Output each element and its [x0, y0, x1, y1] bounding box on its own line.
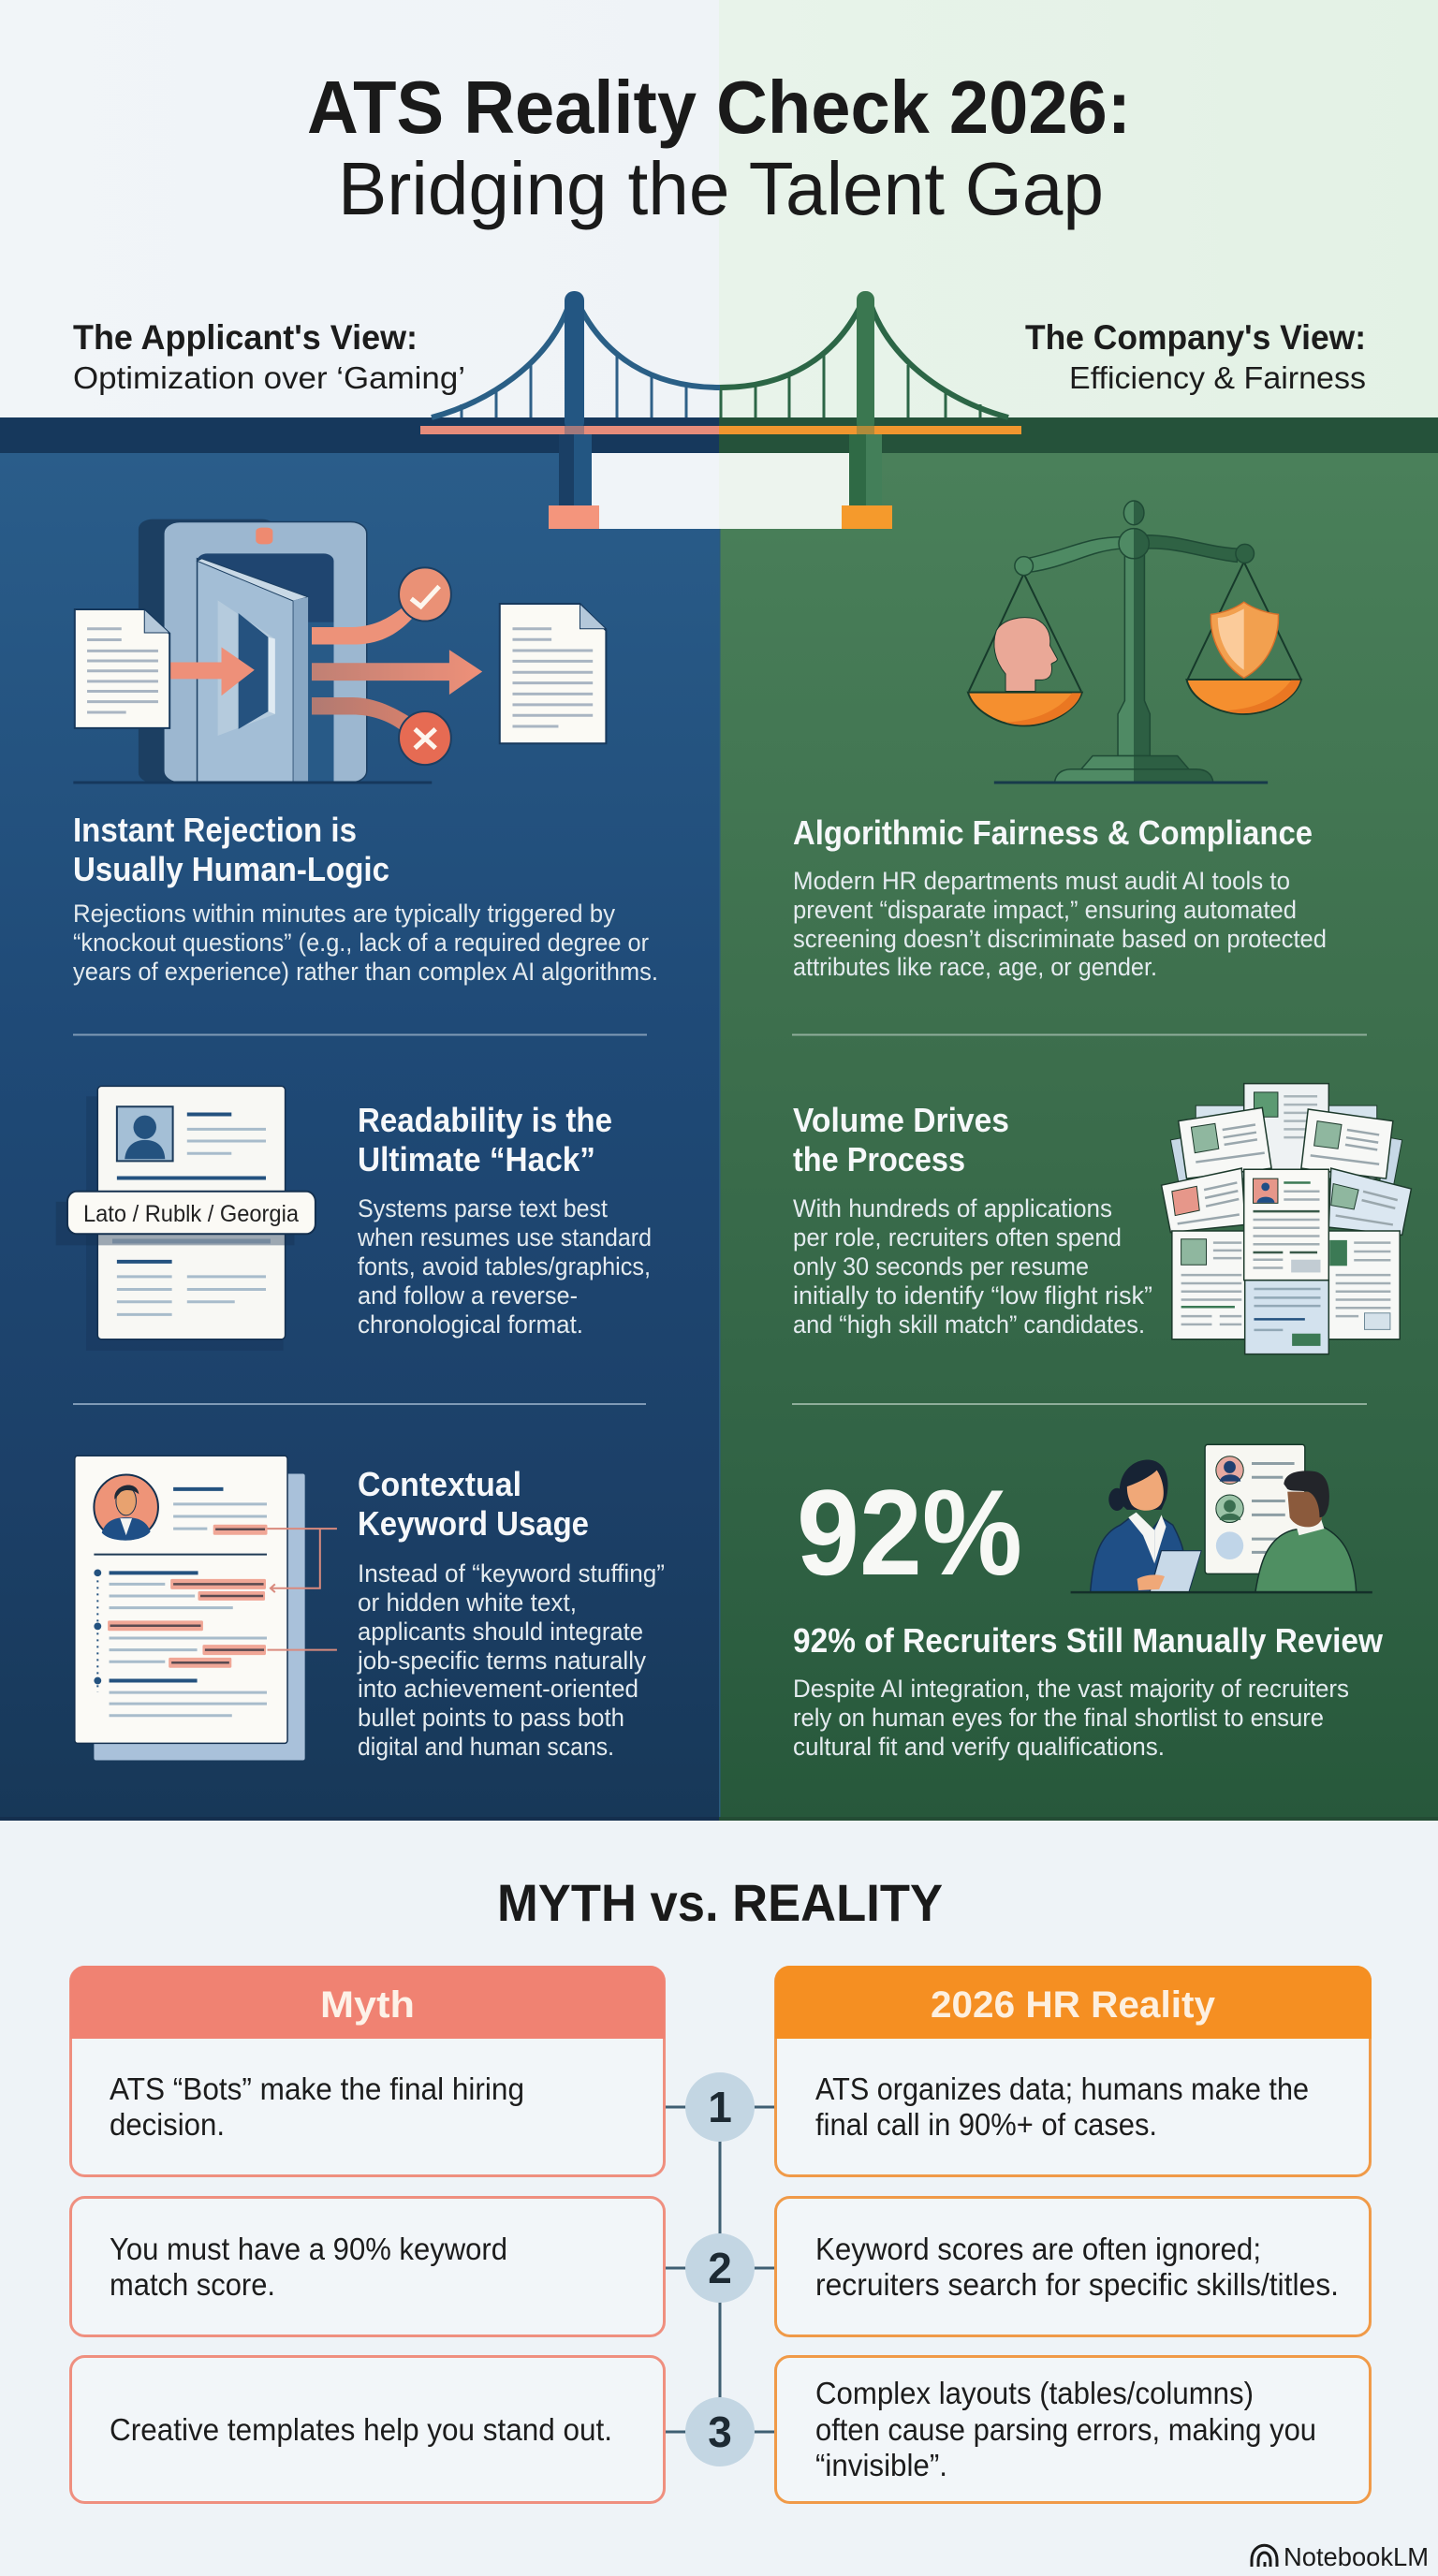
- text block: contextual keyword usage: Instead of “keyword stuffing”: [358, 1559, 665, 1588]
- text block: instant rejection: Rejections within minutes are typically triggered by: [73, 900, 615, 928]
- icon: readable resume with font label: [56, 1086, 315, 1351]
- text block: volume drives the process: per role, recruiters often spend: [793, 1223, 1122, 1251]
- myth card 1 with header: Myth: [320, 1984, 415, 2026]
- text block: algorithmic fairness: Modern HR departments must audit AI tools to: [793, 867, 1290, 895]
- icon: balance scales weighing a person and a shield: [968, 501, 1301, 783]
- text block: volume drives the process: the Process: [793, 1140, 965, 1178]
- reality card 3: often cause parsing errors, making you: [815, 2412, 1316, 2447]
- text block: volume drives the process: and “high skill match” candidates.: [793, 1310, 1145, 1339]
- text block: readability: and follow a reverse-: [358, 1281, 578, 1310]
- text block: algorithmic fairness: screening doesn’t discriminate based on protected: [793, 925, 1327, 953]
- text block: contextual keyword usage: [357, 1465, 665, 1761]
- text block: contextual keyword usage: Keyword Usage: [358, 1504, 589, 1543]
- reality card 1 with header: [775, 1966, 1372, 2175]
- myth card 2: [71, 2198, 665, 2336]
- number badge 3: [685, 2397, 755, 2466]
- text block: recruiters still manually review: Despite AI integration, the vast majority of recruiters: [793, 1675, 1349, 1703]
- text block: volume drives the process: [793, 1101, 1152, 1339]
- myth card 3: [71, 2357, 665, 2503]
- myth card 2: match score.: [110, 2267, 275, 2302]
- number badge 1: 1: [708, 2083, 732, 2131]
- text block: volume drives the process: initially to identify “low flight risk”: [793, 1281, 1152, 1310]
- text block: instant rejection: years of experience) rather than complex AI algorithms.: [73, 958, 658, 986]
- heading: myth vs reality: MYTH vs. REALITY: [497, 1873, 943, 1932]
- icon: pile of resumes: [1162, 1084, 1411, 1354]
- text block: readability: Ultimate “Hack”: [358, 1140, 595, 1178]
- panel: applicant side background: [0, 453, 719, 1821]
- title: ATS Reality Check 2026:: [307, 66, 1131, 149]
- text block: recruiters still manually review: rely on human eyes for the final shortlist to ensure: [793, 1704, 1324, 1732]
- text block: instant rejection: Usually Human-Logic: [73, 850, 389, 888]
- heading: the applicant's view: [73, 318, 465, 395]
- text block: readability: Systems parse text best: [358, 1194, 608, 1222]
- text block: contextual keyword usage: applicants should integrate: [358, 1617, 643, 1646]
- myth card 2: You must have a 90% keyword: [110, 2232, 507, 2266]
- heading: the applicant's view: Optimization over ‘Gaming’: [73, 360, 465, 395]
- text block: readability: chronological format.: [358, 1310, 583, 1339]
- text block: instant rejection: [73, 811, 658, 986]
- connector: numbered spine: [665, 2107, 775, 2432]
- myth card 1 with header: ATS “Bots” make the final hiring: [110, 2071, 524, 2106]
- heading: the company's view: [1025, 318, 1366, 395]
- myth card 1 with header: decision.: [110, 2107, 225, 2142]
- text block: volume drives the process: only 30 seconds per resume: [793, 1252, 1089, 1281]
- title: Bridging the Talent Gap: [338, 147, 1104, 230]
- logo: NotebookLM: NotebookLM: [1284, 2542, 1429, 2571]
- number badge 1: [685, 2072, 755, 2142]
- icon: ATS gate with resume passing through: [73, 520, 606, 783]
- text block: contextual keyword usage: Contextual: [358, 1465, 521, 1503]
- heading: the company's view: The Company's View:: [1025, 318, 1366, 357]
- number badge 2: [685, 2233, 755, 2303]
- text block: contextual keyword usage: into achievement-oriented: [358, 1675, 638, 1703]
- text block: readability: Readability is the: [358, 1101, 612, 1139]
- title: [307, 66, 1131, 230]
- text block: algorithmic fairness: Algorithmic Fairness & Compliance: [793, 813, 1313, 852]
- reality card 2: [775, 2198, 1371, 2336]
- number badge 2: 2: [708, 2244, 732, 2292]
- text block: contextual keyword usage: digital and human scans.: [358, 1733, 614, 1761]
- reality card 1 with header: final call in 90%+ of cases.: [815, 2107, 1157, 2142]
- icon: resume with highlighted keywords: [75, 1456, 337, 1761]
- dark band under bridge: [0, 417, 1438, 1821]
- text block: readability: [357, 1101, 652, 1339]
- reality card 3: Complex layouts (tables/columns): [815, 2376, 1254, 2410]
- myth card 1 with header: [70, 1966, 665, 2175]
- reality card 1 with header: ATS organizes data; humans make the: [815, 2071, 1309, 2106]
- text block: readability: fonts, avoid tables/graphics,: [358, 1252, 651, 1281]
- panel: myth column: [70, 1966, 665, 2503]
- text block: instant rejection: “knockout questions” (e.g., lack of a required degree or: [73, 929, 649, 957]
- reality card 2: recruiters search for specific skills/titles.: [815, 2267, 1339, 2302]
- panel: reality column: [775, 1966, 1372, 2503]
- text block: volume drives the process: Volume Drives: [793, 1101, 1009, 1139]
- text block: contextual keyword usage: job-specific terms naturally: [357, 1647, 646, 1675]
- text block: readability: when resumes use standard: [357, 1223, 652, 1251]
- panel: company side background: [719, 453, 1438, 1821]
- stat: 92%: 92%: [797, 1464, 1022, 1601]
- reality card 1 with header: 2026 HR Reality: [931, 1984, 1216, 2026]
- reality card 3: “invisible”.: [815, 2448, 947, 2482]
- text block: contextual keyword usage: bullet points to pass both: [358, 1704, 624, 1732]
- myth card 3: Creative templates help you stand out.: [110, 2412, 612, 2447]
- reality card 3: [775, 2357, 1371, 2503]
- icon: readable resume with font label: Lato / Rublk / Georgia: [83, 1201, 299, 1227]
- text block: recruiters still manually review: cultural fit and verify qualifications.: [793, 1733, 1165, 1761]
- text block: instant rejection: Instant Rejection is: [73, 811, 357, 849]
- text block: algorithmic fairness: [793, 813, 1327, 981]
- text block: contextual keyword usage: or hidden white text,: [358, 1588, 577, 1617]
- text block: recruiters still manually review: [793, 1621, 1384, 1761]
- icon: suspension bridge: [420, 291, 1021, 529]
- heading: the applicant's view: The Applicant's View:: [73, 318, 418, 357]
- icon: recruiters reviewing a resume: [1071, 1444, 1372, 1592]
- text block: volume drives the process: With hundreds of applications: [793, 1194, 1112, 1222]
- heading: the company's view: Efficiency & Fairness: [1069, 360, 1366, 395]
- text block: recruiters still manually review: 92% of Recruiters Still Manually Review: [793, 1621, 1384, 1660]
- text block: algorithmic fairness: prevent “disparate impact,” ensuring automated: [793, 896, 1297, 924]
- text block: algorithmic fairness: attributes like race, age, or gender.: [793, 953, 1157, 981]
- reality card 2: Keyword scores are often ignored;: [815, 2232, 1261, 2266]
- number badge 3: 3: [708, 2408, 732, 2456]
